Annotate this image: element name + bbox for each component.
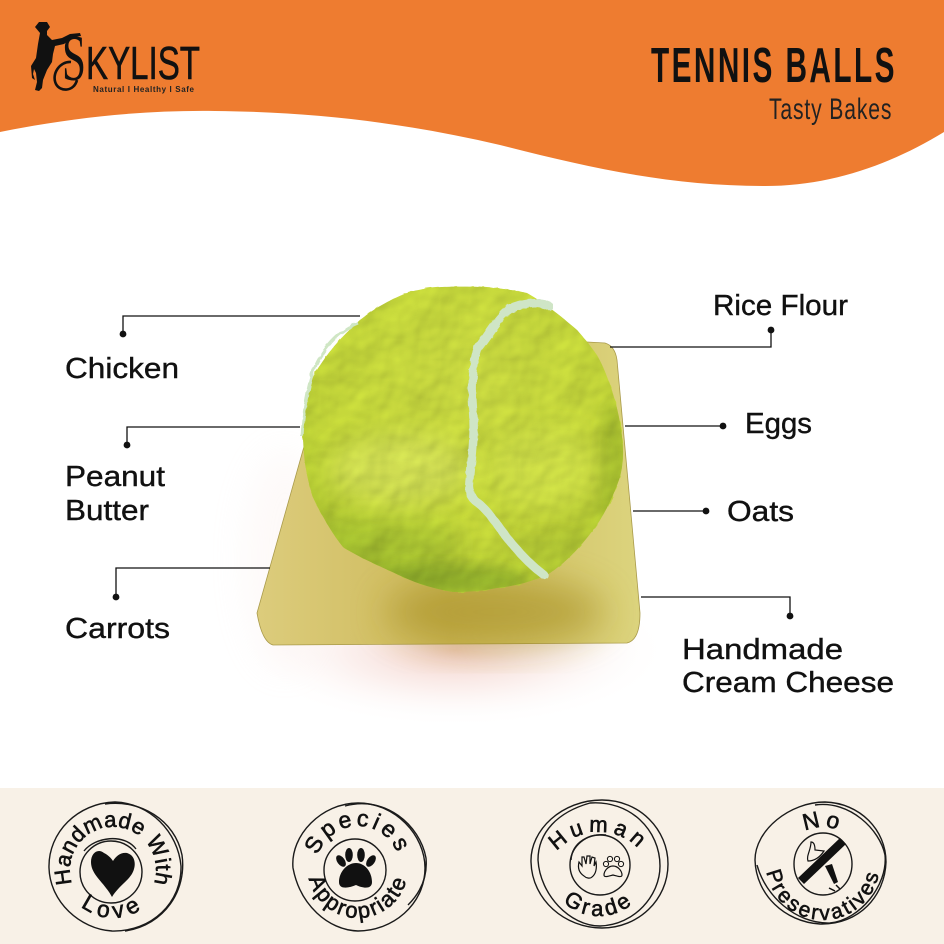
icon: hand and paw — [579, 856, 624, 878]
callout: Carrots — [65, 568, 270, 645]
callout: Oats — [633, 496, 794, 528]
left edge icing — [302, 323, 358, 437]
badge: Human Grade: Grade — [566, 892, 630, 916]
callout: Handmade Cream Cheese — [641, 597, 894, 699]
badge: Human Grade: Human — [548, 820, 644, 850]
callout: Eggs: Eggs — [745, 408, 812, 440]
callout: Handmade Cream Cheese: Handmade — [682, 634, 843, 666]
logo S swirl: S — [62, 22, 86, 95]
badge: Handmade With Love: Handmade With — [54, 812, 172, 885]
badge: Species Appropriate: Appropriate — [308, 878, 406, 924]
badge: Handmade With Love — [48, 801, 184, 932]
icon: crossed-out preservative dropper — [798, 838, 846, 891]
seam — [469, 303, 549, 575]
icon: paw — [334, 848, 378, 888]
footer band — [0, 788, 944, 944]
title: TENNIS BALLS — [651, 37, 897, 93]
callout: Rice Flour: Rice Flour — [713, 290, 848, 322]
logo — [31, 22, 200, 95]
gold board — [257, 342, 640, 645]
callout: Peanut Butter — [65, 427, 300, 527]
icon: dog silhouette — [31, 22, 81, 91]
badge: Species Appropriate: Species — [305, 812, 406, 853]
callout: Carrots: Carrots — [65, 613, 170, 645]
callout: Rice Flour — [610, 290, 848, 347]
callout: Eggs — [625, 408, 812, 440]
pink shadow — [240, 572, 670, 728]
badge: Handmade With Love: Love — [82, 894, 140, 918]
callout: Oats: Oats — [727, 496, 794, 528]
product photo: tennis ball cake on gold board — [256, 286, 640, 702]
callout: Chicken: Chicken — [65, 353, 179, 385]
callout: Handmade Cream Cheese: Cream Cheese — [682, 667, 894, 699]
logo wordmark: KYLIST — [86, 37, 200, 89]
callout: Peanut Butter: Butter — [65, 495, 149, 527]
callout: Chicken — [65, 316, 360, 385]
badge: Species Appropriate — [292, 802, 427, 932]
header band — [0, 0, 944, 195]
logo tagline: Natural I Healthy I Safe — [93, 85, 195, 94]
subtitle: Tasty Bakes — [769, 94, 892, 126]
icon: heart — [91, 851, 135, 897]
badge: No Preservatives: No — [802, 811, 839, 830]
logo S swirl — [55, 22, 86, 95]
badge: No Preservatives: Preservatives — [766, 868, 878, 920]
callout: Peanut Butter: Peanut — [65, 461, 165, 493]
ball — [295, 280, 630, 600]
badge: Human Grade — [530, 799, 669, 929]
ball shadow on board — [385, 578, 605, 646]
badge: No Preservatives — [754, 801, 887, 925]
